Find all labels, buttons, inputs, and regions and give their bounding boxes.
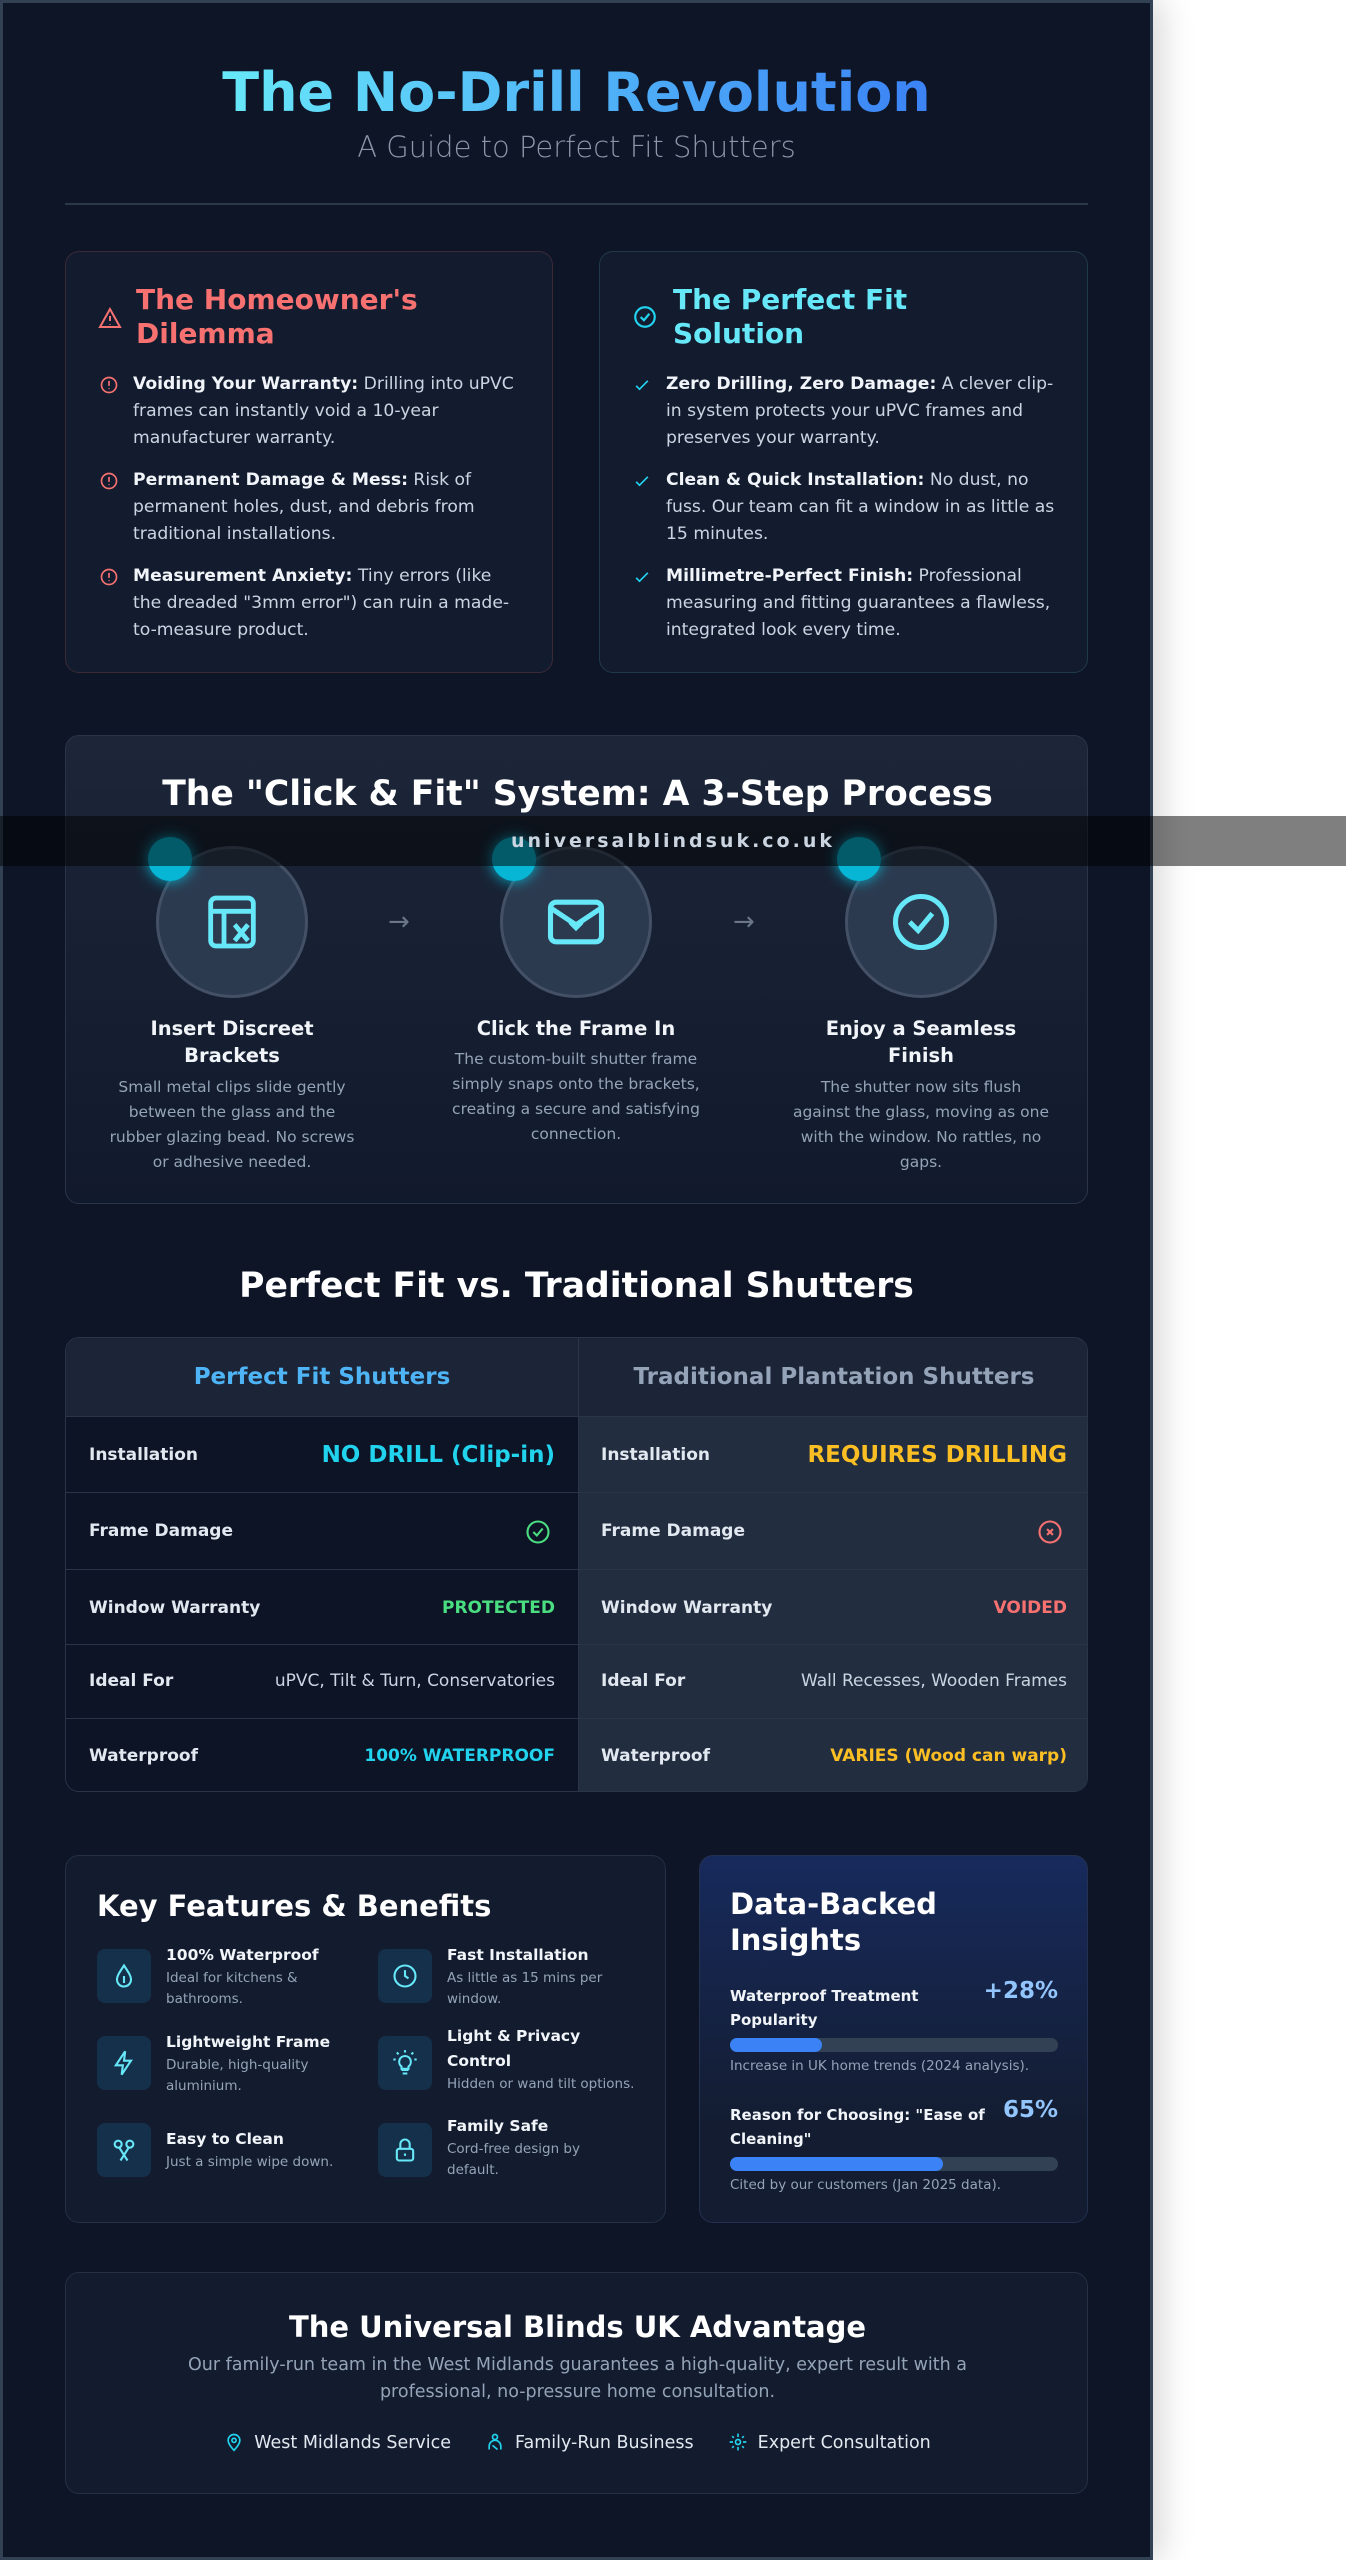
heading: Data-Backed Insights — [730, 1887, 937, 1957]
panel: data insights — [699, 1855, 1088, 2223]
badges row: Family-Run Business — [515, 2433, 694, 2453]
row: installation — [66, 1416, 1089, 1492]
row: waterproof: 100% WATERPROOF — [364, 1746, 555, 1766]
row: waterproof: VARIES (Wood can warp) — [830, 1746, 1067, 1766]
step 2 — [452, 830, 700, 1143]
comparison table — [65, 1337, 1088, 1792]
panel: key features: Just a simple wipe down. — [166, 2154, 333, 2170]
item: millimetre perfect: Millimetre-Perfect Finish: Professional measuring and fitting guarantees a flawless, integrated look every time. — [666, 566, 1050, 640]
row: installation: Installation — [601, 1445, 710, 1465]
heading: The Perfect Fit Solution — [673, 283, 907, 350]
panel: data insights: Cited by our customers (Jan 2025 data). — [730, 2177, 1001, 2193]
panel: key features: Ideal for kitchens & bathrooms. — [166, 1970, 298, 2007]
feature: light & privacy — [378, 2027, 634, 2092]
badges row: Expert Consultation — [758, 2433, 931, 2453]
panel: key features: Light & Privacy Control — [447, 2027, 580, 2070]
row: installation: Installation — [89, 1445, 198, 1465]
panel: advantage — [65, 2272, 1088, 2494]
stat: ease of cleaning: 65% — [1003, 2097, 1058, 2123]
row: installation: NO DRILL (Clip-in) — [322, 1442, 555, 1468]
step 2: Click the Frame In — [477, 1017, 675, 1040]
badges row — [227, 2433, 931, 2453]
panel: key features: Lightweight Frame — [166, 2033, 330, 2051]
feature: waterproof — [97, 1946, 319, 2007]
panel: data insights: Increase in UK home trends (2024 analysis). — [730, 2058, 1029, 2074]
panel: key features: Durable, high-quality aluminium. — [166, 2057, 308, 2094]
row: frame damage — [66, 1492, 1089, 1568]
item: zero drilling: Zero Drilling, Zero Damage: A clever clip-in system protects your uPVC frames and preserves your warranty. — [666, 374, 1053, 448]
row: warranty: PROTECTED — [442, 1598, 555, 1618]
comparison heading: Perfect Fit vs. Traditional Shutters — [239, 1266, 914, 1306]
row: ideal for: uPVC, Tilt & Turn, Conservatories — [275, 1671, 555, 1691]
panel: click & fit process — [65, 735, 1088, 1204]
body text: Our family-run team in the West Midlands guarantees a high-quality, expert result with a professional, no-pressure home consultation. — [188, 2355, 967, 2402]
row: waterproof: Waterproof — [601, 1746, 710, 1766]
feature: family safe — [378, 2117, 580, 2178]
step 1 — [110, 830, 354, 1171]
subtitle: A Guide to Perfect Fit Shutters — [357, 130, 796, 164]
panel: key features: As little as 15 mins per window. — [447, 1970, 602, 2007]
watermark banner — [0, 816, 1346, 866]
panel: key features: 100% Waterproof — [166, 1946, 319, 1964]
heading: The Homeowner's Dilemma — [136, 283, 418, 350]
icon: bracket window — [156, 846, 308, 998]
row: ideal for — [66, 1644, 1089, 1717]
table header — [66, 1338, 1089, 1416]
row: frame damage: Frame Damage — [601, 1521, 745, 1541]
step 2: The custom-built shutter frame simply snaps onto the brackets, creating a secure and satisfying connection. — [452, 1050, 700, 1143]
step 3: The shutter now sits flush against the glass, moving as one with the window. No rattles, no gaps. — [793, 1078, 1049, 1171]
feature: easy to clean — [97, 2123, 333, 2177]
panel: key features — [65, 1855, 666, 2223]
row: waterproof: Waterproof — [89, 1746, 198, 1766]
icon: frame click — [500, 846, 652, 998]
heading: The Universal Blinds UK Advantage — [289, 2310, 866, 2344]
stat: ease of cleaning — [730, 2097, 1058, 2193]
table header: Traditional Plantation Shutters — [634, 1364, 1034, 1390]
stat: waterproof popularity: Waterproof Treatment Popularity — [730, 1987, 918, 2029]
heading: The "Click & Fit" System: A 3-Step Process — [162, 774, 993, 814]
arrow 1: → — [388, 907, 410, 937]
row: warranty: Window Warranty — [601, 1598, 772, 1618]
arrow 2: → — [733, 907, 755, 937]
stat: waterproof popularity — [730, 1978, 1058, 2074]
icon: warning — [98, 307, 122, 328]
panel: key features: Hidden or wand tilt options. — [447, 2076, 634, 2092]
step 3 — [793, 830, 1049, 1171]
item: warranty: Voiding Your Warranty: Drilling into uPVC frames can instantly void a 10-year manufacturer warranty. — [133, 374, 514, 448]
row: frame damage: Frame Damage — [89, 1521, 233, 1541]
step 1: Insert Discreet Brackets — [150, 1017, 314, 1067]
feature: lightweight — [97, 2033, 330, 2094]
heading: Key Features & Benefits — [97, 1889, 491, 1923]
stat: waterproof popularity: +28% — [984, 1978, 1058, 2004]
panel: key features: Family Safe — [447, 2117, 548, 2135]
item: damage: Permanent Damage & Mess: Risk of permanent holes, dust, and debris from traditional installations. — [133, 470, 475, 544]
watermark banner: universalblindsuk.co.uk — [511, 830, 835, 852]
icon: check circle — [634, 306, 656, 328]
stat: ease of cleaning: Reason for Choosing: "Ease of Cleaning" — [730, 2106, 985, 2148]
row: waterproof — [66, 1718, 1089, 1793]
row: ideal for: Ideal For — [89, 1671, 173, 1691]
panel: key features: Cord-free design by default. — [447, 2141, 580, 2178]
table header: Perfect Fit Shutters — [194, 1364, 450, 1390]
row: ideal for: Wall Recesses, Wooden Frames — [801, 1671, 1067, 1691]
item: measurement: Measurement Anxiety: Tiny errors (like the dreaded "3mm error") can ruin a made-to-measure product. — [133, 566, 509, 640]
title: The No-Drill Revolution — [222, 61, 931, 124]
row: ideal for: Ideal For — [601, 1671, 685, 1691]
panel: key features: Easy to Clean — [166, 2130, 284, 2148]
icon: seamless check — [845, 846, 997, 998]
panel: homeowner's dilemma — [65, 251, 553, 673]
step 3: Enjoy a Seamless Finish — [826, 1017, 1016, 1067]
panel: key features: Fast Installation — [447, 1946, 589, 1964]
step 1: Small metal clips slide gently between the glass and the rubber glazing bead. No screws or adhesive needed. — [110, 1078, 354, 1171]
row: installation: REQUIRES DRILLING — [807, 1442, 1067, 1468]
item: clean install: Clean & Quick Installation: No dust, no fuss. Our team can fit a window in as little as 15 minutes. — [666, 470, 1054, 544]
panel: perfect fit solution — [599, 251, 1088, 673]
row: warranty: VOIDED — [994, 1598, 1067, 1618]
badges row: West Midlands Service — [254, 2433, 451, 2453]
row: warranty: Window Warranty — [89, 1598, 260, 1618]
row: warranty — [66, 1569, 1089, 1645]
feature: fast installation — [378, 1946, 602, 2007]
